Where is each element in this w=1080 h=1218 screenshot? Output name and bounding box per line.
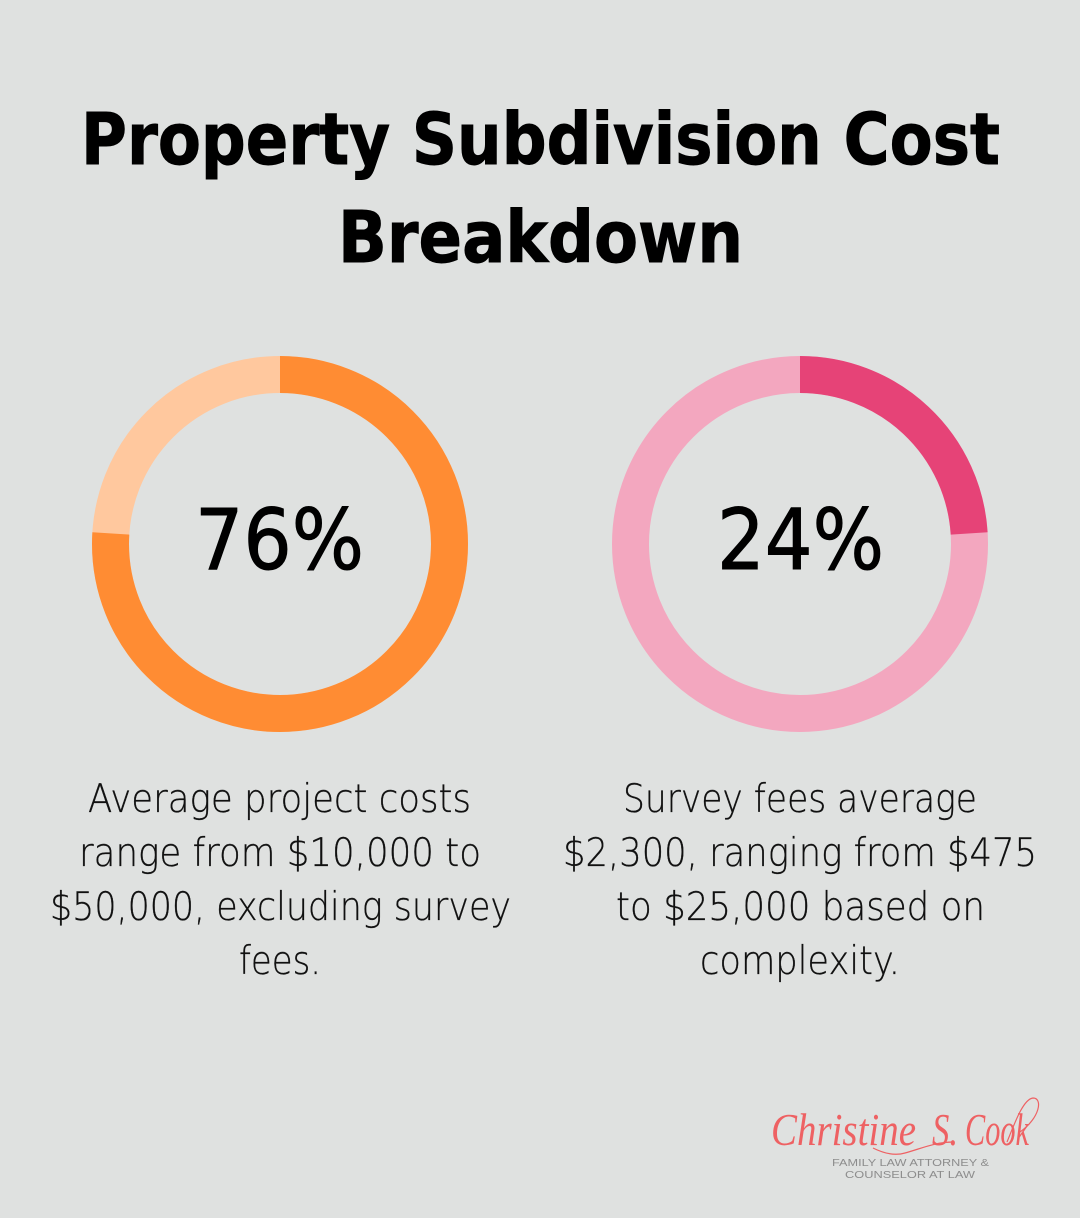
description: survey fees: to $25,000 based on — [616, 885, 985, 930]
description: project costs — [50, 777, 511, 984]
description: survey fees — [563, 777, 1037, 984]
donut chart: 76% — [110, 374, 450, 714]
title: Breakdown — [338, 196, 743, 279]
logo tagline — [832, 1158, 989, 1181]
description: project costs: Average project costs — [88, 777, 471, 822]
logo signature: Cook — [965, 1104, 1030, 1155]
description: project costs: fees. — [239, 939, 321, 984]
description: survey fees: complexity. — [700, 939, 900, 984]
logo signature — [771, 1098, 1039, 1155]
panel: average project costs — [50, 374, 511, 984]
logo signature: S. — [932, 1104, 958, 1155]
logo tagline: COUNSELOR AT LAW — [845, 1170, 976, 1181]
description: survey fees: $2,300, ranging from $475 — [563, 831, 1037, 876]
donut chart: 24% — [630, 374, 970, 714]
logo signature: Christine — [771, 1104, 916, 1155]
title — [81, 98, 1000, 279]
stat: 76%: 76% — [195, 491, 364, 589]
stat: 24%: 24% — [717, 491, 884, 589]
panel: survey fees — [563, 374, 1037, 984]
logo: Christine S. Cook — [771, 1098, 1039, 1181]
description: project costs: $50,000, excluding survey — [50, 885, 511, 930]
description: project costs: range from $10,000 to — [79, 831, 481, 876]
logo tagline: FAMILY LAW ATTORNEY & — [832, 1158, 989, 1169]
description: survey fees: Survey fees average — [623, 777, 977, 822]
